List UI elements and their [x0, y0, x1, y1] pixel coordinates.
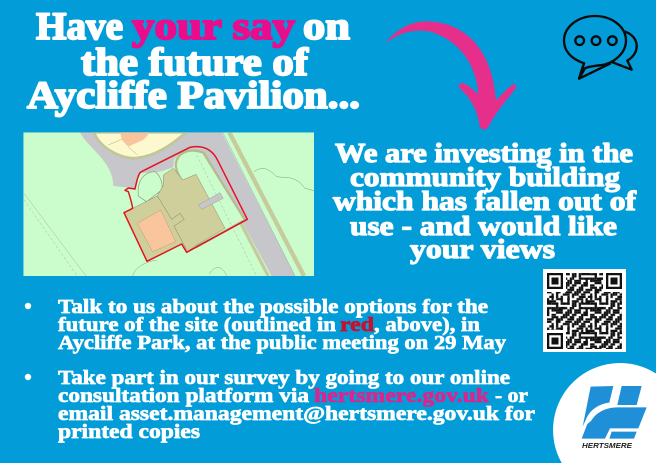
investing statement: [333, 137, 637, 264]
bullet one: Aycliffe Park, at the public meeting on 29 May: [58, 332, 507, 354]
Hertsmere logo: HERTSMERE: [582, 441, 633, 450]
thin map lines: [254, 169, 314, 191]
title: your say: [132, 5, 296, 48]
icon: speech bubbles: [564, 16, 637, 79]
bullet one: red: [340, 314, 375, 336]
red site outline: [124, 147, 247, 261]
bullet two: [25, 367, 535, 443]
bullet two: - or: [495, 385, 528, 407]
bullet list: [25, 296, 535, 443]
title: [27, 5, 360, 117]
title: Aycliffe Pavilion...: [27, 74, 360, 117]
bullet two: Take part in our survey by going to our online: [58, 367, 510, 389]
bullet two: hertsmere.gov.uk: [314, 385, 490, 407]
road: [80, 132, 295, 276]
QR code: [543, 269, 626, 352]
bullet one: , above), in: [374, 314, 481, 336]
investing statement: We are investing in the: [335, 137, 633, 168]
bullet one: future of the site (outlined in: [58, 314, 337, 336]
title: on: [303, 5, 350, 48]
title: Have: [36, 5, 123, 48]
title: the future of: [81, 41, 309, 84]
investing statement: which has fallen out of: [333, 185, 637, 216]
investing statement: community building: [350, 161, 620, 192]
houses plot: [94, 132, 186, 158]
icon: pink curved arrow: [385, 21, 516, 129]
Hertsmere logo: [553, 363, 656, 463]
bullet one: Talk to us about the possible options for the: [58, 296, 488, 318]
bullet two: consultation platform via: [58, 385, 309, 407]
plot green areas: [138, 172, 162, 202]
bullet two: printed copies: [58, 421, 200, 443]
bullet one: [25, 296, 507, 354]
bullet two: email asset.management@hertsmere.gov.uk for: [58, 403, 535, 425]
building: [124, 168, 225, 261]
investing statement: use - and would like: [350, 210, 617, 241]
map of site: [23, 132, 314, 276]
verge strips: [229, 132, 304, 276]
investing statement: your views: [410, 233, 555, 264]
